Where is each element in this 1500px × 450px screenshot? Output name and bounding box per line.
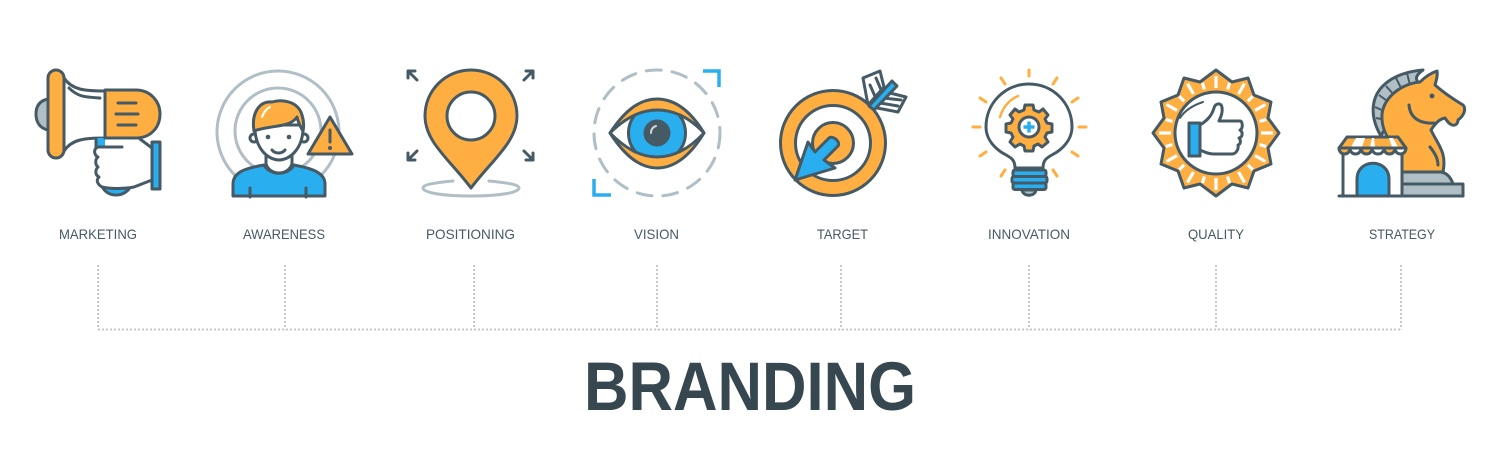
label: strategy: STRATEGY	[1369, 226, 1436, 242]
icon: eye	[594, 70, 720, 196]
label: positioning: POSITIONING	[426, 226, 515, 242]
label: target: TARGET	[817, 226, 868, 242]
infographic	[34, 68, 1466, 410]
icon: target with arrow	[780, 71, 906, 196]
icon: person with warning	[217, 71, 352, 197]
icon: location pin	[408, 70, 533, 196]
icon: chess knight and shop	[1339, 70, 1465, 196]
label: quality: QUALITY	[1188, 226, 1245, 242]
label: awareness: AWARENESS	[243, 226, 325, 242]
label: innovation: INNOVATION	[988, 226, 1070, 242]
icon: megaphone	[36, 70, 160, 195]
icon: quality badge with thumb up	[1153, 70, 1279, 196]
dotted connector	[98, 265, 1401, 330]
icon: light bulb with gear	[973, 70, 1086, 195]
label: marketing: MARKETING	[59, 226, 137, 242]
title: BRANDING	[584, 348, 916, 425]
label: vision: VISION	[634, 226, 679, 242]
